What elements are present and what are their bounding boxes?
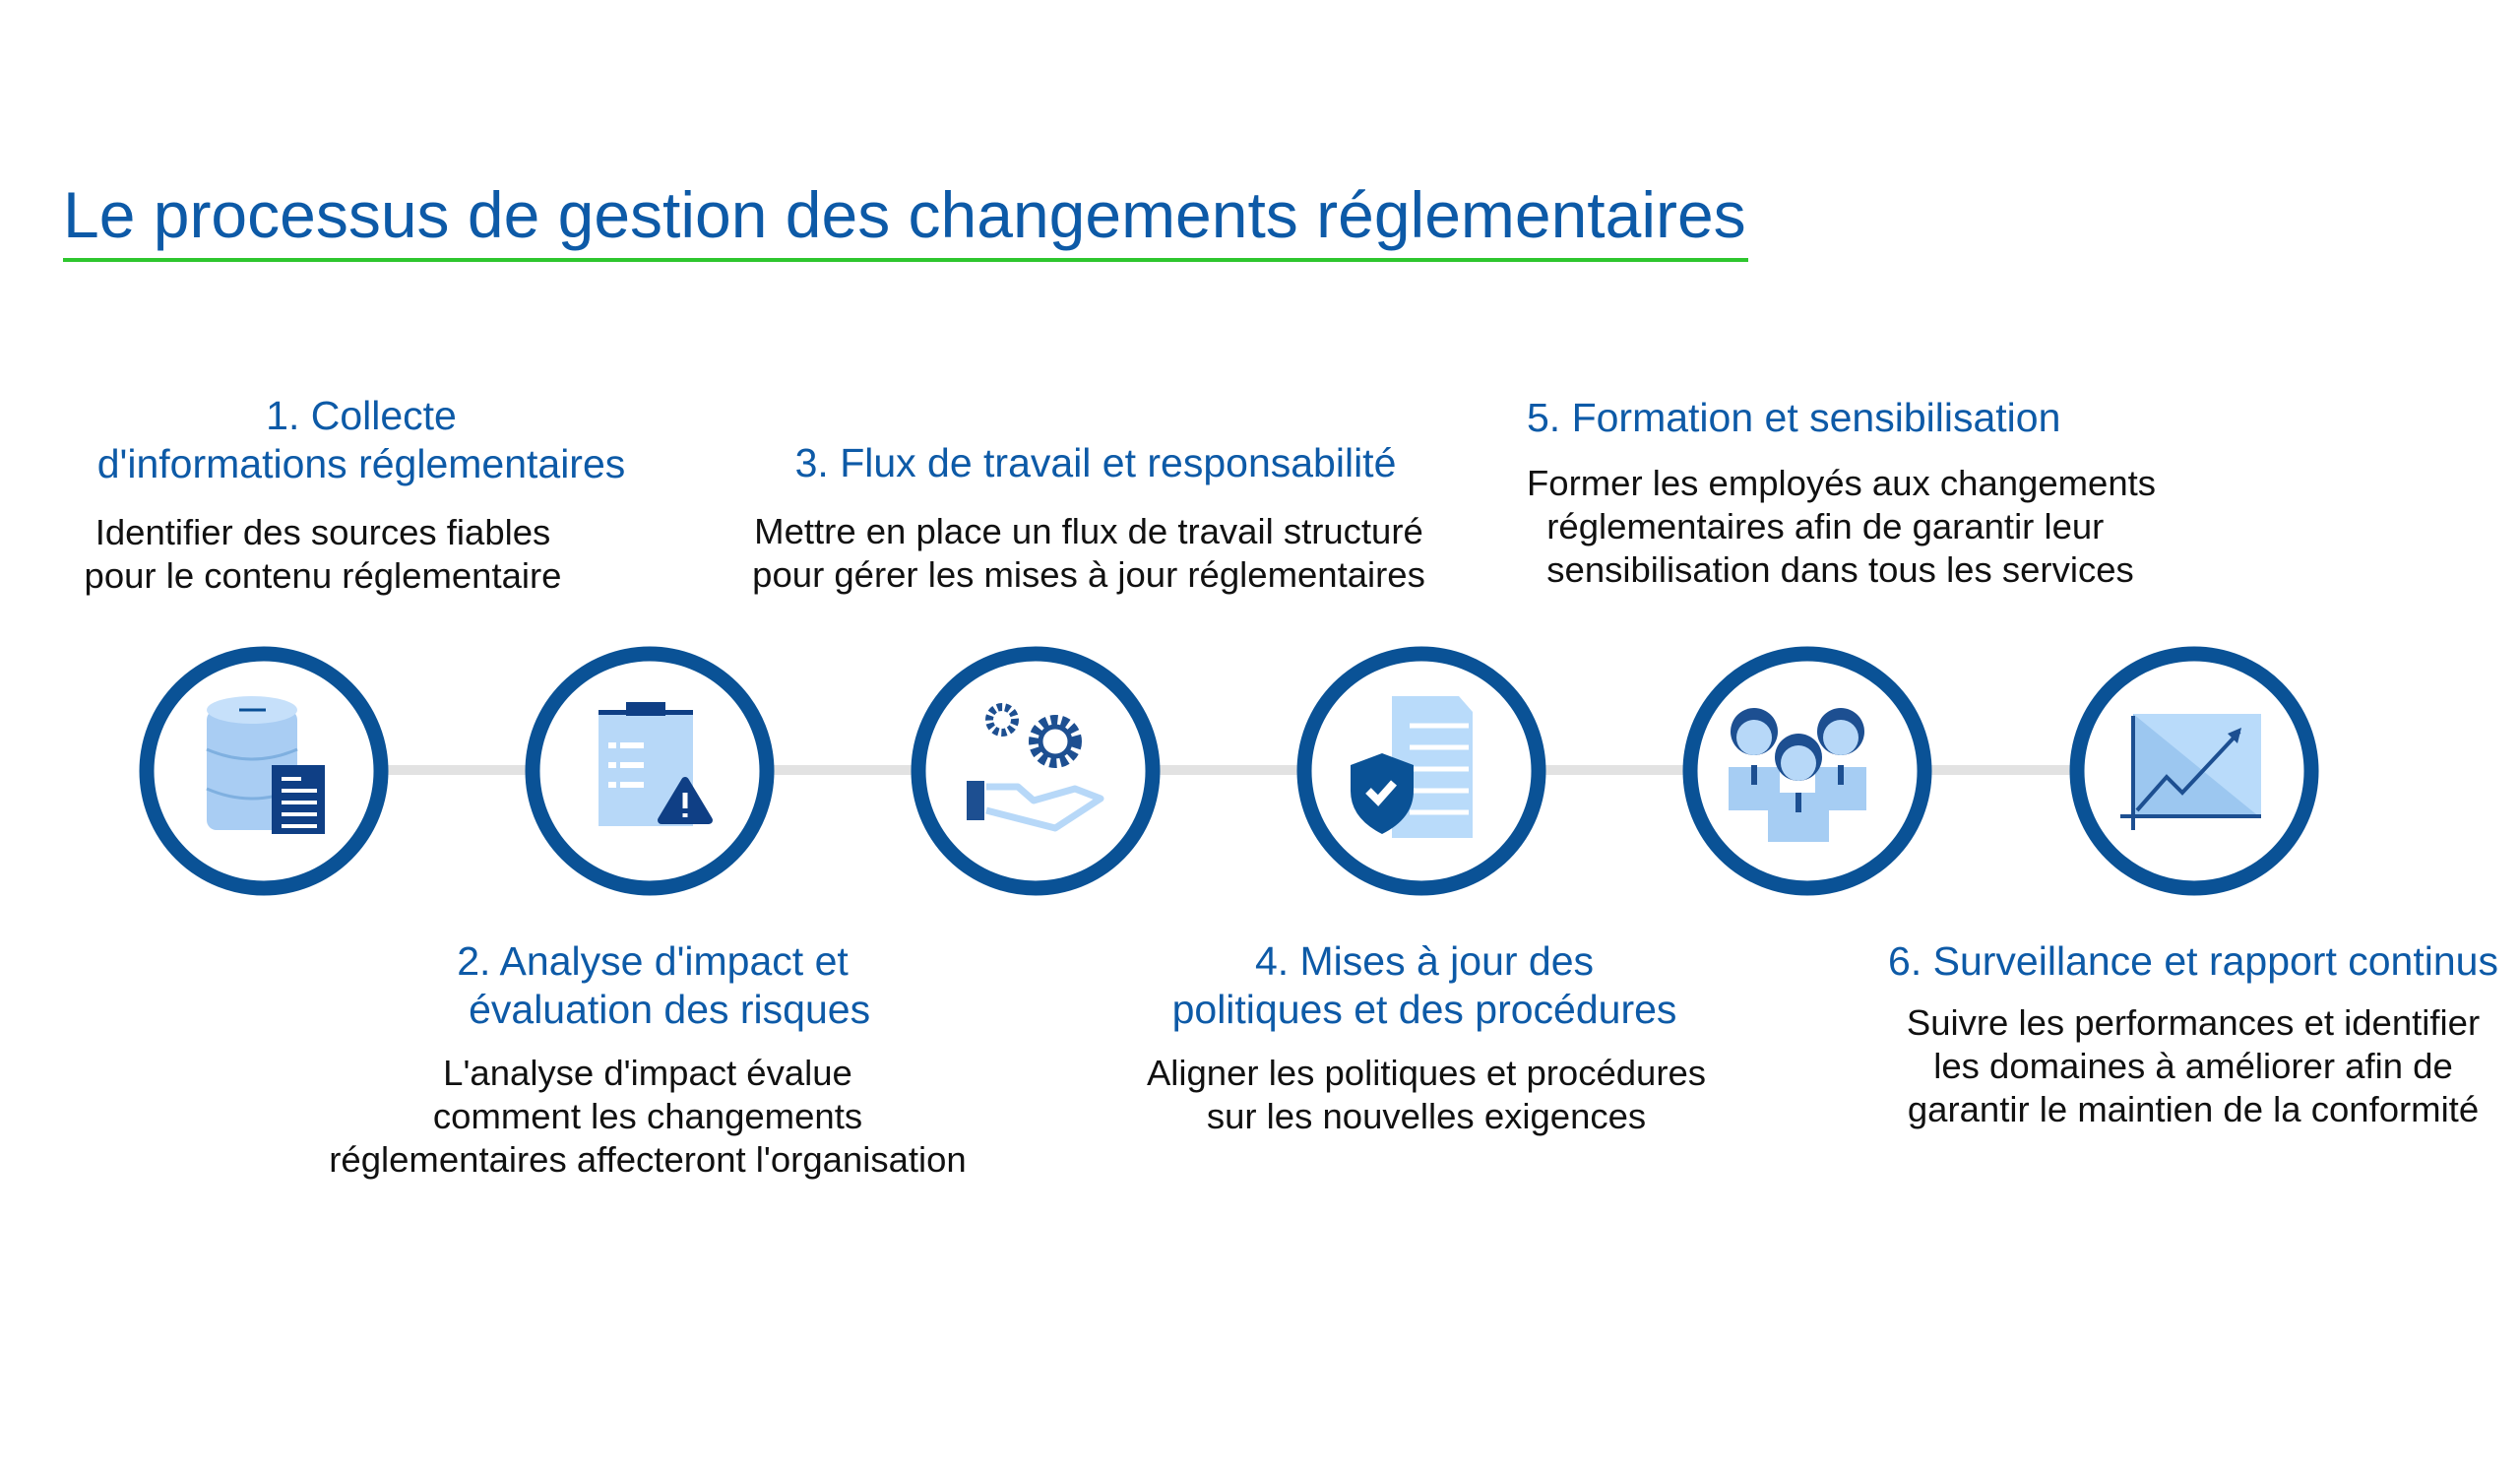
step 1 heading: 1. Collecte bbox=[266, 393, 457, 438]
step 4 heading: politiques et des procédures bbox=[1172, 987, 1676, 1032]
step 5 text: sensibilisation dans tous les services bbox=[1546, 549, 2134, 590]
icon 6: chart bbox=[2077, 654, 2311, 888]
step 6 text bbox=[1907, 1002, 2480, 1129]
step 4 heading bbox=[1172, 938, 1676, 1032]
icon 4: document with shield bbox=[1304, 654, 1539, 888]
icon 5: people bbox=[1690, 654, 1924, 888]
step 1 heading bbox=[97, 393, 625, 486]
step 3 heading: 3. Flux de travail et responsabilité bbox=[795, 440, 1396, 485]
icon 1: database with document bbox=[147, 654, 381, 888]
step 1 text: pour le contenu réglementaire bbox=[85, 555, 561, 596]
step 2 text: réglementaires affecteront l'organisation bbox=[329, 1139, 967, 1180]
step 5 heading: 5. Formation et sensibilisation bbox=[1527, 395, 2060, 440]
icon 3: gears and hand bbox=[918, 654, 1153, 888]
step 3 text: pour gérer les mises à jour réglementaires bbox=[752, 554, 1425, 595]
step 4 text bbox=[1147, 1053, 1706, 1136]
step 2 text: L'analyse d'impact évalue bbox=[443, 1053, 852, 1093]
step 2 text: comment les changements bbox=[433, 1096, 862, 1136]
step 2 heading: 2. Analyse d'impact et bbox=[457, 938, 849, 984]
step 3 text: Mettre en place un flux de travail structuré bbox=[754, 511, 1423, 551]
step 6 text: les domaines à améliorer afin de bbox=[1933, 1046, 2453, 1086]
step 6 text: Suivre les performances et identifier bbox=[1907, 1002, 2480, 1043]
step 1 text bbox=[85, 512, 561, 596]
step 4 text: sur les nouvelles exigences bbox=[1207, 1096, 1646, 1136]
icon 2: clipboard with warning bbox=[533, 654, 767, 888]
step 2 heading: évaluation des risques bbox=[469, 987, 870, 1032]
step 1 heading: d'informations réglementaires bbox=[97, 441, 625, 486]
step 6 text: garantir le maintien de la conformité bbox=[1908, 1089, 2479, 1129]
step 4 text: Aligner les politiques et procédures bbox=[1147, 1053, 1706, 1093]
step 2 text bbox=[329, 1053, 967, 1180]
step 5 text bbox=[1527, 463, 2156, 590]
step 2 heading bbox=[457, 938, 870, 1032]
step 5 text: Former les employés aux changements bbox=[1527, 463, 2156, 503]
step 5 text: réglementaires afin de garantir leur bbox=[1546, 506, 2104, 546]
step 6 heading: 6. Surveillance et rapport continus bbox=[1888, 938, 2498, 984]
step 3 text bbox=[752, 511, 1425, 595]
step 4 heading: 4. Mises à jour des bbox=[1255, 938, 1594, 984]
title: Le processus de gestion des changements réglementaires bbox=[63, 178, 1746, 251]
step 1 text: Identifier des sources fiables bbox=[95, 512, 550, 552]
